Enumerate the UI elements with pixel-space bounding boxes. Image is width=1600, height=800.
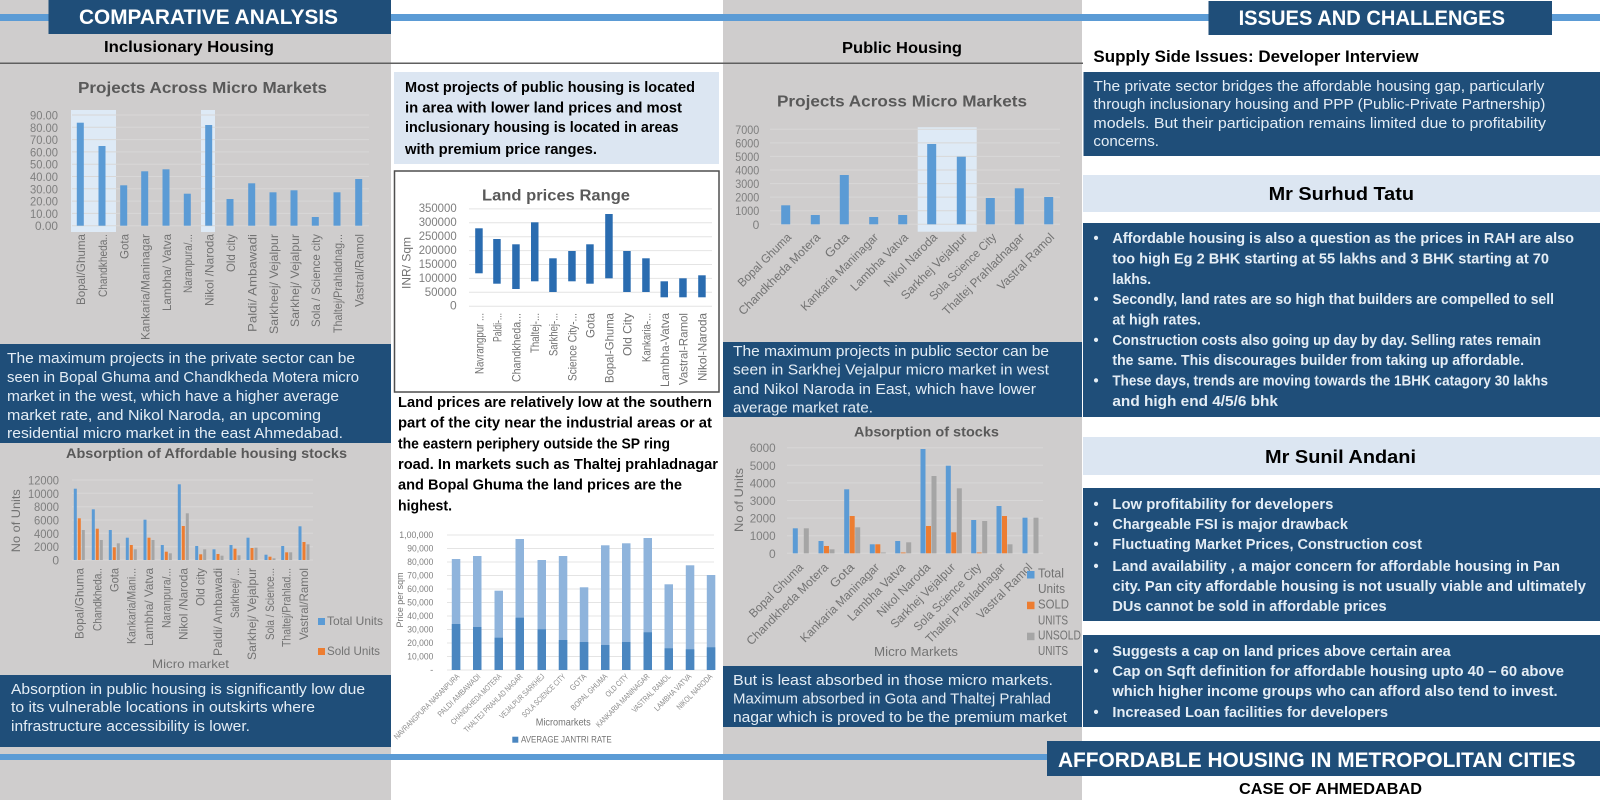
bar chart: projects across micro markets, public: Projects Across Micro Markets [777, 94, 1027, 111]
callout: absorption in public housing [0, 675, 391, 747]
callout: maximum private projects: market in the west, which have a higher average [7, 389, 339, 405]
bar chart: projects across micro markets, inclusionary: Sola / Science city [309, 234, 323, 327]
bar chart: absorption of affordable housing stocks: Naranpura/... [159, 568, 173, 628]
range chart: land prices range [394, 171, 719, 392]
panel: Mr Sunil Andani bullet points: • [1094, 559, 1099, 575]
callout: maximum public projects: and Nikol Naroda in East, which have lower [733, 382, 1036, 398]
axis title: price per sqm: Price per sqm [395, 572, 406, 628]
heading: Mr Surhud Tatu: Mr Surhud Tatu [1269, 183, 1414, 204]
bar chart: absorption of stocks: Gota [827, 560, 857, 591]
panel: suggestions bullet points: • [1094, 664, 1099, 680]
range chart: land prices range: Old City [620, 313, 634, 356]
bar chart: projects across micro markets, inclusionary: Sarkheej/ Vejalpur [267, 234, 281, 334]
axis title: INR per sqm: INR/ Sqm [400, 237, 414, 289]
bar chart: projects across micro markets, inclusionary: 40.00 [30, 170, 58, 184]
heading: comparative analysis [48, 0, 391, 34]
bar chart: absorption of affordable housing stocks: 0 [52, 554, 59, 568]
stacked bar chart: jantri rate vs market rate: VASTRAL RAMOL [630, 672, 673, 714]
callout: maximum public projects: seen in Sarkhej Vejalpur micro market in west [733, 362, 1049, 378]
bar chart: projects across micro markets, inclusionary: 0.00 [35, 219, 58, 233]
bar chart: projects across micro markets, inclusionary: 50.00 [30, 158, 58, 172]
range chart: land prices range: Navrangpur ... [472, 313, 486, 374]
bar chart: absorption of affordable housing stocks: Chandkheda.. [90, 568, 104, 631]
callout: maximum private projects: The maximum projects in the private sector can be [7, 351, 355, 367]
callout: least absorbed: nagar which is proved to be the premium market [733, 710, 1067, 726]
bar chart: absorption of affordable housing stocks: Vastral/Ramol [297, 568, 311, 640]
bar chart: absorption of stocks: Sola Science City [911, 560, 984, 634]
heading: public housing: Public Housing [842, 40, 962, 57]
panel: Mr Sunil Andani bullet points [1083, 488, 1600, 621]
bar chart: projects across micro markets, inclusionary [30, 80, 369, 340]
callout: maximum private projects: market rate, and Nikol Naroda, an upcoming [7, 408, 321, 424]
stacked bar chart: jantri rate vs market rate: KANKARIA MANINAGAR [594, 672, 652, 729]
legend: total, sold, unsold units: UNITS [1038, 612, 1068, 627]
range chart: land prices range: Chandkheda... [510, 313, 524, 382]
panel: suggestions bullet points: which higher income groups who can afford also tend to invest. [1111, 684, 1558, 700]
bar chart: absorption of stocks: Chandkheda Motera [743, 560, 831, 648]
axis title: micromarkets: Micromarkets [536, 718, 591, 729]
text block: private sector overview: through inclusionary housing and PPP (Public-Private Partnership) [1093, 97, 1545, 113]
bar chart: absorption of stocks: Vastral Ramol [974, 560, 1035, 622]
range chart: land prices range: 200000 [419, 243, 457, 257]
bar chart: absorption of affordable housing stocks: Sarkheej/ ... [228, 568, 242, 618]
bar chart: absorption of affordable housing stocks: Sarkhej/ Vejalpur [245, 568, 259, 660]
bar chart: projects across micro markets, public: Chandkheda Motera [735, 230, 823, 318]
range chart: land prices range: Bopal-Ghuma [602, 313, 616, 383]
panel: suggestions bullet points: Suggests a cap on land prices above certain area [1112, 644, 1452, 660]
bar chart: projects across micro markets, inclusionary: 20.00 [30, 195, 58, 209]
bar chart: projects across micro markets, public: Vastral Ramol [994, 230, 1057, 293]
bar chart: absorption of affordable housing stocks: 6000 [34, 514, 59, 528]
range chart: land prices range: 100000 [419, 271, 457, 285]
panel: Mr Surhud Tatu bullet points [1083, 223, 1600, 417]
bar chart: absorption of stocks: Lambha Vatva [844, 560, 908, 624]
panel: suggestions bullet points: Cap on Sqft definition for affordable housing upto 40 – 60 above [1112, 664, 1564, 680]
range chart: land prices range: 50000 [425, 285, 457, 299]
bar chart: absorption of affordable housing stocks: Paldi/ Ambawadi [211, 568, 225, 656]
bar chart: projects across micro markets, inclusionary: Kankaria/Maninagar [138, 234, 152, 340]
panel: Mr Surhud Tatu bullet points: These days, trends are moving towards the 1BHK catagory 30 lakhs [1112, 374, 1548, 390]
bar chart: projects across micro markets, inclusionary: Sarkhej/ Vejalpur [288, 234, 302, 327]
bar chart: absorption of affordable housing stocks: Kankaria/Mani... [124, 568, 138, 644]
bar chart: absorption of affordable housing stocks: 2000 [34, 540, 59, 554]
text block: land prices explanation: highest. [398, 498, 452, 514]
stacked bar chart: jantri rate vs market rate: GOTA [568, 672, 589, 693]
panel: suggestions bullet points [1083, 635, 1600, 727]
bar chart: projects across micro markets, public: 1000 [735, 204, 760, 218]
legend: total, sold, unsold units: UNITS [1038, 643, 1068, 658]
bar chart: projects across micro markets, public: 5000 [735, 150, 760, 164]
text block: private sector overview: models. But their participation remains limited due to profitability [1093, 116, 1547, 132]
bar chart: absorption of affordable housing stocks: Lambha/ Vatva [142, 568, 156, 646]
stacked bar chart: jantri rate vs market rate [392, 530, 715, 746]
bar chart: projects across micro markets, public: Thaltej Prahladnagar [939, 230, 1027, 318]
axis title: no of units: No of Units [9, 489, 23, 552]
stacked bar chart: jantri rate vs market rate: LAMBHA VATVA [652, 672, 694, 713]
panel: Mr Sunil Andani bullet points: Low profitability for developers [1112, 497, 1333, 513]
stacked bar chart: jantri rate vs market rate: CHANDKHEDA MOTERA [449, 672, 504, 726]
bar chart: projects across micro markets, inclusionary: 80.00 [30, 121, 58, 135]
bar chart: absorption of stocks: Kankaria Maninagar [797, 560, 882, 645]
panel: Mr Surhud Tatu bullet points: and high end 4/5/6 bhk [1112, 394, 1279, 410]
callout: absorption in public housing: Absorption in public housing is significantly low due [11, 682, 365, 698]
callout: public vs inclusionary location: inclusionary housing is located in areas [405, 120, 678, 136]
text block: private sector overview [1084, 72, 1600, 156]
bar chart: projects across micro markets, public: Nikol Naroda [881, 230, 940, 290]
bar chart: projects across micro markets, inclusionary: 90.00 [30, 108, 58, 122]
panel: Mr Surhud Tatu bullet points: too high Eg 2 BHK starting at 55 lakhs and 3 BHK starting at 70 [1112, 251, 1549, 267]
stacked bar chart: jantri rate vs market rate: 90,000 [407, 544, 433, 554]
panel: Mr Sunil Andani bullet points: Chargeable FSI is major drawback [1112, 517, 1349, 533]
text block: land prices explanation: part of the city near the industrial areas or at [398, 416, 712, 432]
panel: Mr Sunil Andani bullet points: • [1094, 517, 1099, 533]
stacked bar chart: jantri rate vs market rate: THALTEJ PRAHLAD NAGAR [462, 672, 525, 734]
callout: public vs inclusionary location: Most projects of public housing is located [405, 80, 695, 96]
bar chart: absorption of stocks: Bopal Ghuma [746, 560, 806, 620]
bar chart: absorption of affordable housing stocks: 4000 [34, 527, 59, 541]
bar chart: absorption of affordable housing stocks: Nikol /Naroda [176, 568, 190, 640]
legend: total, sold, unsold units: SOLD [1038, 596, 1069, 611]
bar chart: projects across micro markets, public: 0 [753, 218, 760, 232]
stacked bar chart: jantri rate vs market rate: 10,000 [407, 652, 433, 662]
stacked bar chart: jantri rate vs market rate: 60,000 [407, 584, 433, 595]
bar chart: absorption of stocks [732, 424, 1081, 659]
callout: least absorbed [723, 666, 1082, 727]
bar chart: projects across micro markets, inclusionary: Vastral/Ramol [352, 234, 366, 307]
stacked bar chart: jantri rate vs market rate: VEJALPUR SARKHEJ [498, 672, 546, 721]
axis title: no of units, public: No of Units [732, 468, 746, 532]
bar chart: absorption of stocks: 0 [769, 547, 776, 561]
bar chart: absorption of stocks: Sarkhej Vejalpur [887, 560, 958, 631]
bar chart: projects across micro markets, public [735, 94, 1060, 318]
stacked bar chart: jantri rate vs market rate: - [430, 665, 433, 676]
bar chart: absorption of affordable housing stocks: Gota [107, 568, 121, 592]
stacked bar chart: jantri rate vs market rate: 40,000 [407, 611, 433, 622]
heading: Mr Surhud Tatu [1083, 175, 1600, 212]
stacked bar chart: jantri rate vs market rate: SOLA SCIENCE CITY [520, 672, 568, 719]
stacked bar chart: jantri rate vs market rate: 30,000 [407, 624, 433, 636]
bar chart: absorption of affordable housing stocks: Thaltej/Prahlad... [280, 568, 294, 647]
bar chart: projects across micro markets, public: 3000 [735, 177, 760, 191]
panel: Mr Surhud Tatu bullet points: • [1094, 292, 1099, 308]
callout: maximum private projects [0, 344, 391, 443]
panel: Mr Sunil Andani bullet points: DUs cannot be sold in affordable prices [1112, 599, 1387, 615]
stacked bar chart: jantri rate vs market rate: 80,000 [407, 557, 433, 568]
text block: land prices explanation [398, 395, 718, 514]
stacked bar chart: jantri rate vs market rate: 20,000 [407, 638, 433, 649]
heading: issues and challenges: ISSUES AND CHALLENGES [1239, 6, 1505, 30]
range chart: land prices range: Kankaria-... [640, 313, 654, 362]
bar chart: absorption of affordable housing stocks [9, 445, 383, 671]
bar chart: projects across micro markets, public: Bopal Ghuma [735, 230, 794, 290]
range chart: land prices range: 250000 [419, 229, 457, 243]
range chart: land prices range: Science City-... [566, 313, 580, 381]
panel: Mr Sunil Andani bullet points: city. Pan city affordable housing is not usually viable and ultimately [1112, 579, 1586, 595]
range chart: land prices range: 0 [450, 298, 457, 312]
heading: inclusionary housing: Inclusionary Housing [104, 39, 274, 56]
bar chart: absorption of stocks: Thaltej Prahladnagar [923, 560, 1008, 646]
bar chart: projects across micro markets, inclusionary: Naranpura/... [181, 234, 195, 293]
bar chart: absorption of affordable housing stocks: 8000 [34, 500, 59, 514]
callout: absorption in public housing: infrastructure accessibility is lower. [11, 719, 250, 735]
bar chart: projects across micro markets, inclusionary: 70.00 [30, 133, 58, 147]
panel: Mr Surhud Tatu bullet points: Secondly, land rates are so high that builders are compelled to sell [1112, 292, 1554, 308]
panel: suggestions bullet points: • [1094, 644, 1099, 660]
subtitle: case of ahmedabad: CASE OF AHMEDABAD [1239, 781, 1422, 798]
callout: absorption in public housing: to its vulnerable locations in outskirts where [11, 700, 315, 716]
callout: maximum public projects: average market rate. [733, 400, 873, 416]
legend: Total Units [327, 614, 383, 628]
legend: average jantri rate: AVERAGE JANTRI RATE [521, 735, 612, 746]
range chart: land prices range: Land prices Range [482, 188, 630, 205]
bar chart: projects across micro markets, public: Lambha Vatva [847, 230, 911, 294]
callout: maximum private projects: residential micro market in the east Ahmedabad. [7, 426, 343, 442]
panel: Mr Surhud Tatu bullet points: Affordable housing is also a question as the prices in RAH are also [1112, 231, 1574, 247]
bar chart: absorption of stocks: 3000 [750, 494, 776, 508]
panel: suggestions bullet points: Increased Loan facilities for developers [1112, 705, 1388, 721]
bar chart: projects across micro markets, inclusionary: 10.00 [30, 207, 58, 221]
stacked bar chart: jantri rate vs market rate: 50,000 [407, 598, 433, 608]
stacked bar chart: jantri rate vs market rate: BOPAL GHUMA [569, 672, 610, 712]
panel: Mr Sunil Andani bullet points: Fluctuating Market Prices, Construction cost [1112, 537, 1422, 553]
bar chart: projects across micro markets, public: Sarkhej Vejalpur [898, 230, 970, 302]
bar chart: projects across micro markets, public: 6000 [735, 136, 760, 150]
stacked bar chart: jantri rate vs market rate: NIKOL NARODA [675, 672, 715, 712]
callout: public vs inclusionary location [394, 72, 719, 164]
bar chart: projects across micro markets, inclusionary: Chandkheda.. [96, 234, 110, 297]
heading: comparative analysis: COMPARATIVE ANALYSIS [79, 5, 338, 29]
bar chart: absorption of stocks: 1000 [750, 529, 776, 543]
callout: least absorbed: Maximum absorbed in Gota and Thaltej Prahlad [733, 692, 1051, 708]
bar chart: projects across micro markets, inclusionary: Lambha/ Vatva [160, 234, 174, 311]
axis title: micro markets: Micro Markets [874, 644, 959, 659]
range chart: land prices range: Gota [584, 313, 598, 338]
heading: issues and challenges [1208, 1, 1552, 35]
bar chart: projects across micro markets, inclusionary: 60.00 [30, 145, 58, 159]
legend: total, sold, unsold units [1027, 566, 1081, 658]
callout: least absorbed: But is least absorbed in those micro markets. [733, 673, 1053, 689]
range chart: land prices range: 300000 [419, 215, 457, 229]
axis title: micro market: Micro market [152, 657, 230, 671]
stacked bar chart: jantri rate vs market rate: 70,000 [407, 570, 433, 582]
callout: public vs inclusionary location: with premium price ranges. [404, 142, 597, 158]
text block: private sector overview: The private sector bridges the affordable housing gap, particularly [1093, 79, 1545, 95]
panel: Mr Sunil Andani bullet points: Land availability , a major concern for affordable housing in Pan [1112, 559, 1560, 575]
heading: Mr Sunil Andani: Mr Sunil Andani [1265, 446, 1416, 467]
bar chart: projects across micro markets, public: 4000 [735, 164, 760, 178]
bar chart: projects across micro markets, public: Gota [822, 230, 852, 261]
callout: maximum public projects [723, 342, 1082, 417]
stacked bar chart: jantri rate vs market rate: PALDI AMBAWADI [436, 672, 482, 719]
range chart: land prices range: 350000 [419, 201, 457, 215]
bar chart: projects across micro markets, public: 7000 [735, 123, 760, 137]
panel: Mr Sunil Andani bullet points: • [1094, 497, 1099, 513]
legend [318, 614, 383, 658]
text block: land prices explanation: the eastern periphery outside the SP ring [398, 436, 670, 452]
bar chart: absorption of affordable housing stocks: Sola / Science... [263, 568, 277, 640]
bar chart: projects across micro markets, inclusionary: Projects Across Micro Markets [78, 80, 327, 97]
stacked bar chart: jantri rate vs market rate: OLD CITY [604, 672, 631, 699]
bar chart: absorption of stocks: 6000 [750, 441, 776, 455]
stacked bar chart: jantri rate vs market rate: NAVRANGPURA NARANPURA [392, 672, 462, 741]
legend: total, sold, unsold units: UNSOLD [1038, 627, 1081, 642]
panel: Mr Surhud Tatu bullet points: Construction costs also going up day by day. Selling rates remain [1112, 333, 1541, 349]
bar chart: projects across micro markets, inclusionary: Paldi/ Ambawadi [246, 234, 260, 332]
bar chart: projects across micro markets, inclusionary: 30.00 [30, 182, 58, 196]
range chart: land prices range: Sarkhej-... [546, 313, 560, 356]
bar chart: absorption of stocks: Nikol Naroda [874, 560, 933, 620]
panel: Mr Surhud Tatu bullet points: • [1094, 333, 1099, 349]
stacked bar chart: jantri rate vs market rate: 1,00,000 [399, 530, 433, 541]
bar chart: projects across micro markets, inclusionary: Old city [224, 234, 238, 272]
bar chart: projects across micro markets, inclusionary: Gota [118, 234, 132, 259]
legend: Sold Units [327, 644, 380, 658]
range chart: land prices range: Nikol-Naroda [696, 313, 710, 381]
bar chart: absorption of affordable housing stocks: Old city [194, 568, 208, 606]
bar chart: absorption of affordable housing stocks: Bopal/Ghuma [72, 568, 86, 639]
panel: suggestions bullet points: • [1094, 705, 1099, 721]
range chart: land prices range: Lambha-Vatva [658, 313, 672, 387]
title: affordable housing in metropolitan cities: AFFORDABLE HOUSING IN METROPOLITAN CITIES [1058, 748, 1576, 772]
callout: maximum public projects: The maximum projects in public sector can be [733, 344, 1049, 360]
callout: maximum private projects: seen in Bopal Ghuma and Chandkheda Motera micro [7, 370, 359, 386]
callout: public vs inclusionary location: in area with lower land prices and most [405, 100, 682, 116]
bar chart: absorption of stocks: 4000 [750, 476, 776, 490]
bar chart: projects across micro markets, inclusionary: Thaltej/Prahladnag... [331, 234, 345, 333]
range chart: land prices range: 150000 [419, 257, 457, 271]
panel: Mr Surhud Tatu bullet points: the same. This discourages builder from taking up affordable. [1112, 353, 1524, 369]
panel: Mr Surhud Tatu bullet points: • [1094, 374, 1099, 390]
text block: private sector overview: concerns. [1093, 134, 1159, 150]
bar chart: projects across micro markets, public: Sola Science City [926, 230, 999, 303]
range chart: land prices range: Vastral-Ramol [676, 313, 690, 385]
legend: total, sold, unsold units: Units [1038, 581, 1065, 596]
text block: land prices explanation: and Bopal Ghuma the land prices are the [398, 478, 682, 494]
panel: Mr Surhud Tatu bullet points: at high rates. [1112, 313, 1201, 329]
heading: Mr Sunil Andani [1083, 437, 1600, 475]
bar chart: absorption of affordable housing stocks: Absorption of Affordable housing stocks [66, 445, 347, 461]
bar chart: projects across micro markets, public: 2000 [735, 191, 760, 205]
bar chart: absorption of stocks: Absorption of stocks [854, 424, 999, 440]
bar chart: projects across micro markets, inclusionary: Bopal/Ghuma [74, 234, 88, 305]
text block: land prices explanation: Land prices are relatively low at the southern [398, 395, 712, 411]
bar chart: projects across micro markets, inclusionary: Nikol /Naroda [202, 234, 216, 306]
title: affordable housing in metropolitan cities [1047, 741, 1600, 776]
panel: Mr Sunil Andani bullet points: • [1094, 537, 1099, 553]
bar chart: absorption of affordable housing stocks: 10000 [28, 487, 59, 501]
panel: Mr Surhud Tatu bullet points: lakhs. [1112, 272, 1151, 288]
bar chart: absorption of affordable housing stocks: 12000 [28, 474, 59, 488]
text block: land prices explanation: road. In markets such as Thaltej prahladnagar [398, 457, 718, 473]
bar chart: projects across micro markets, public: Kankaria Maninagar [798, 230, 881, 314]
legend: total, sold, unsold units: Total [1038, 566, 1064, 581]
panel: Mr Surhud Tatu bullet points: • [1094, 231, 1099, 247]
heading: supply side issues: Supply Side Issues: Developer Interview [1093, 47, 1419, 66]
range chart: land prices range: Paldi-... [490, 313, 504, 342]
bar chart: absorption of stocks: 2000 [750, 512, 776, 526]
range chart: land prices range: Thaltej-... [528, 313, 542, 353]
bar chart: absorption of stocks: 5000 [750, 459, 776, 473]
